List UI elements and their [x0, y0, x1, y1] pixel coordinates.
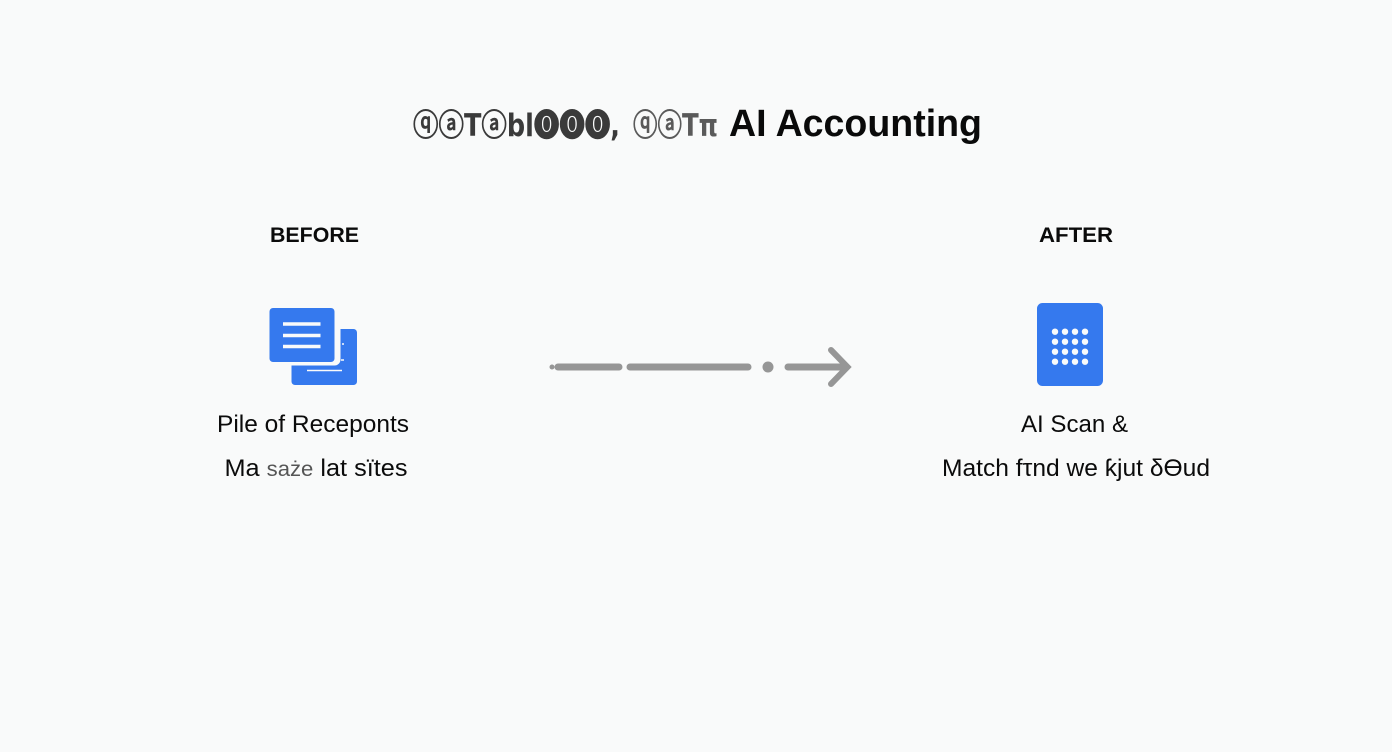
panel: before — [217, 223, 409, 482]
icon: pile of receipts — [264, 303, 357, 385]
heading: after: AFTER — [1039, 223, 1113, 247]
arrow: before to after — [550, 350, 848, 384]
title: ⓠⓐTπ — [633, 108, 718, 144]
text: match label: Match fτnd we ƙjut δϴud — [942, 455, 1210, 482]
text: manual label: Ma saże lat sïtes — [224, 455, 408, 482]
title: AI Accounting — [729, 103, 982, 145]
text: receipts label: Pile of Receponts — [217, 411, 409, 438]
panel: after — [942, 223, 1210, 482]
icon: AI scanner — [1037, 303, 1103, 386]
heading: before: BEFORE — [270, 223, 359, 247]
text: scan label: AI Scan & — [1021, 411, 1128, 438]
title — [413, 103, 982, 145]
title: ⓠⓐTⓐbl⓿⓿⓿, — [413, 108, 620, 144]
